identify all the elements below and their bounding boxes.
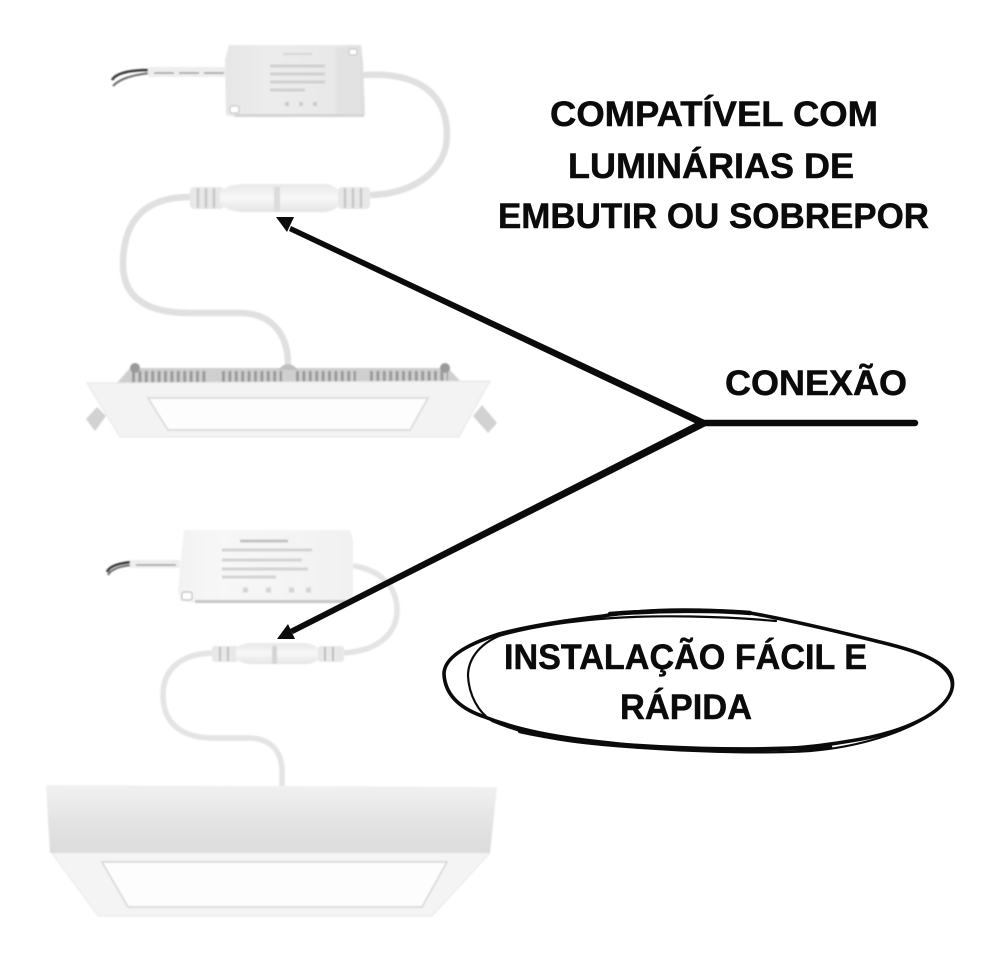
top cable <box>123 75 447 364</box>
connection label: CONEXÃO <box>725 364 907 403</box>
compatibility heading: COMPATÍVEL COM <box>550 94 878 134</box>
top driver box <box>225 45 365 117</box>
top recessed luminaire with driver <box>86 45 497 437</box>
bottom connector <box>212 643 344 664</box>
top panel light <box>148 398 428 430</box>
top panel clips <box>86 405 497 433</box>
installation callout text: RÁPIDA <box>620 687 752 727</box>
horizontal line <box>705 420 915 426</box>
top panel fins <box>117 363 462 383</box>
top panel frame <box>87 381 490 437</box>
top connector <box>190 184 370 212</box>
bottom luminaire light <box>102 862 447 907</box>
bottom driver box <box>178 530 353 603</box>
compatibility heading: EMBUTIR OU SOBREPOR <box>498 197 929 236</box>
connection arrows <box>276 217 915 639</box>
arrow to bottom connector <box>277 419 708 639</box>
bottom luminaire side <box>46 785 497 853</box>
bottom driver input wires <box>107 560 180 575</box>
compatibility heading: LUMINÁRIAS DE <box>568 146 854 186</box>
arrow to top connector <box>276 217 707 427</box>
bottom cable <box>163 566 397 786</box>
top driver input wires <box>112 67 226 86</box>
bottom luminaire front frame <box>52 853 490 916</box>
installation callout text <box>504 637 867 727</box>
bottom surface luminaire with driver <box>46 530 497 916</box>
installation callout text: INSTALAÇÃO FÁCIL E <box>504 637 867 677</box>
hand-drawn ellipse callout <box>444 610 953 752</box>
compatibility heading <box>498 94 929 236</box>
